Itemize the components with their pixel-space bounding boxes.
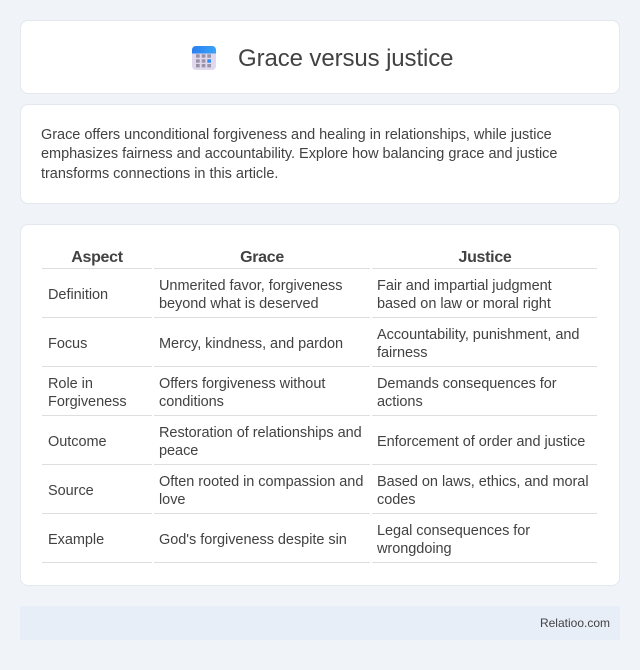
Definition: Grace <box>159 278 342 312</box>
footer credit: Relatioo.com <box>540 616 610 630</box>
row: Role in Forgiveness <box>48 376 127 410</box>
Outcome: Justice: Enforcement of order and justice <box>377 434 585 450</box>
footer bar <box>20 606 620 640</box>
row: Role in Forgiveness: Forgiveness <box>48 394 127 410</box>
Outcome: Grace: peace <box>159 443 198 459</box>
heading: Grace versus justice <box>238 45 453 72</box>
row: Example: Example <box>48 532 104 548</box>
Definition: Grace: beyond what is deserved <box>159 296 318 312</box>
intro paragraph: Grace offers unconditional forgiveness and healing in relationships, while justice <box>41 126 552 142</box>
title card <box>20 20 620 94</box>
intro text panel <box>20 104 620 204</box>
Example: Justice <box>377 523 530 557</box>
Role: Justice: actions <box>377 394 423 410</box>
Focus: Justice: Accountability, punishment, and <box>377 327 579 343</box>
Definition: Justice: Fair and impartial judgment <box>377 278 552 294</box>
row: Focus: Focus <box>48 336 87 352</box>
Role: Justice: Demands consequences for <box>377 376 557 392</box>
Example: Justice: wrongdoing <box>377 541 452 557</box>
Source: Justice: codes <box>377 492 416 508</box>
Source: Grace: Often rooted in compassion and <box>159 474 363 490</box>
Focus: Justice <box>377 327 579 361</box>
panel: comparison table <box>20 224 620 586</box>
Source: Justice: Based on laws, ethics, and moral <box>377 474 588 490</box>
Definition: Grace: Unmerited favor, forgiveness <box>159 278 342 294</box>
Example: Grace: God's forgiveness despite sin <box>159 532 347 548</box>
intro paragraph: transforms connections in this article. <box>41 166 278 182</box>
Example: Justice: Legal consequences for <box>377 523 530 539</box>
Definition: Justice <box>377 278 552 312</box>
header: Justice: Justice <box>458 249 512 266</box>
icon: calendar <box>192 46 216 70</box>
header: Aspect: Aspect <box>71 249 123 266</box>
row: Definition: Definition <box>48 287 108 303</box>
Definition: Justice: based on law or moral right <box>377 296 551 312</box>
row: Outcome: Outcome <box>48 434 107 450</box>
Source: Grace <box>159 474 363 508</box>
Focus: Justice: fairness <box>377 345 427 361</box>
Source: Grace: love <box>159 492 185 508</box>
intro paragraph: emphasizes fairness and accountability. Explore how balancing grace and justice <box>41 146 557 162</box>
Source: Justice <box>377 474 588 508</box>
Role: Justice <box>377 376 557 410</box>
row: Role in Forgiveness: Role in <box>48 376 93 392</box>
Outcome: Grace <box>159 425 362 459</box>
Outcome: Grace: Restoration of relationships and <box>159 425 362 441</box>
row: Source: Source <box>48 483 94 499</box>
Role: Grace: Offers forgiveness without <box>159 376 325 392</box>
Focus: Grace: Mercy, kindness, and pardon <box>159 336 343 352</box>
Role: Grace <box>159 376 326 410</box>
intro paragraph <box>41 126 557 182</box>
header: Grace: Grace <box>240 249 284 266</box>
Role: Grace: conditions <box>159 394 224 410</box>
